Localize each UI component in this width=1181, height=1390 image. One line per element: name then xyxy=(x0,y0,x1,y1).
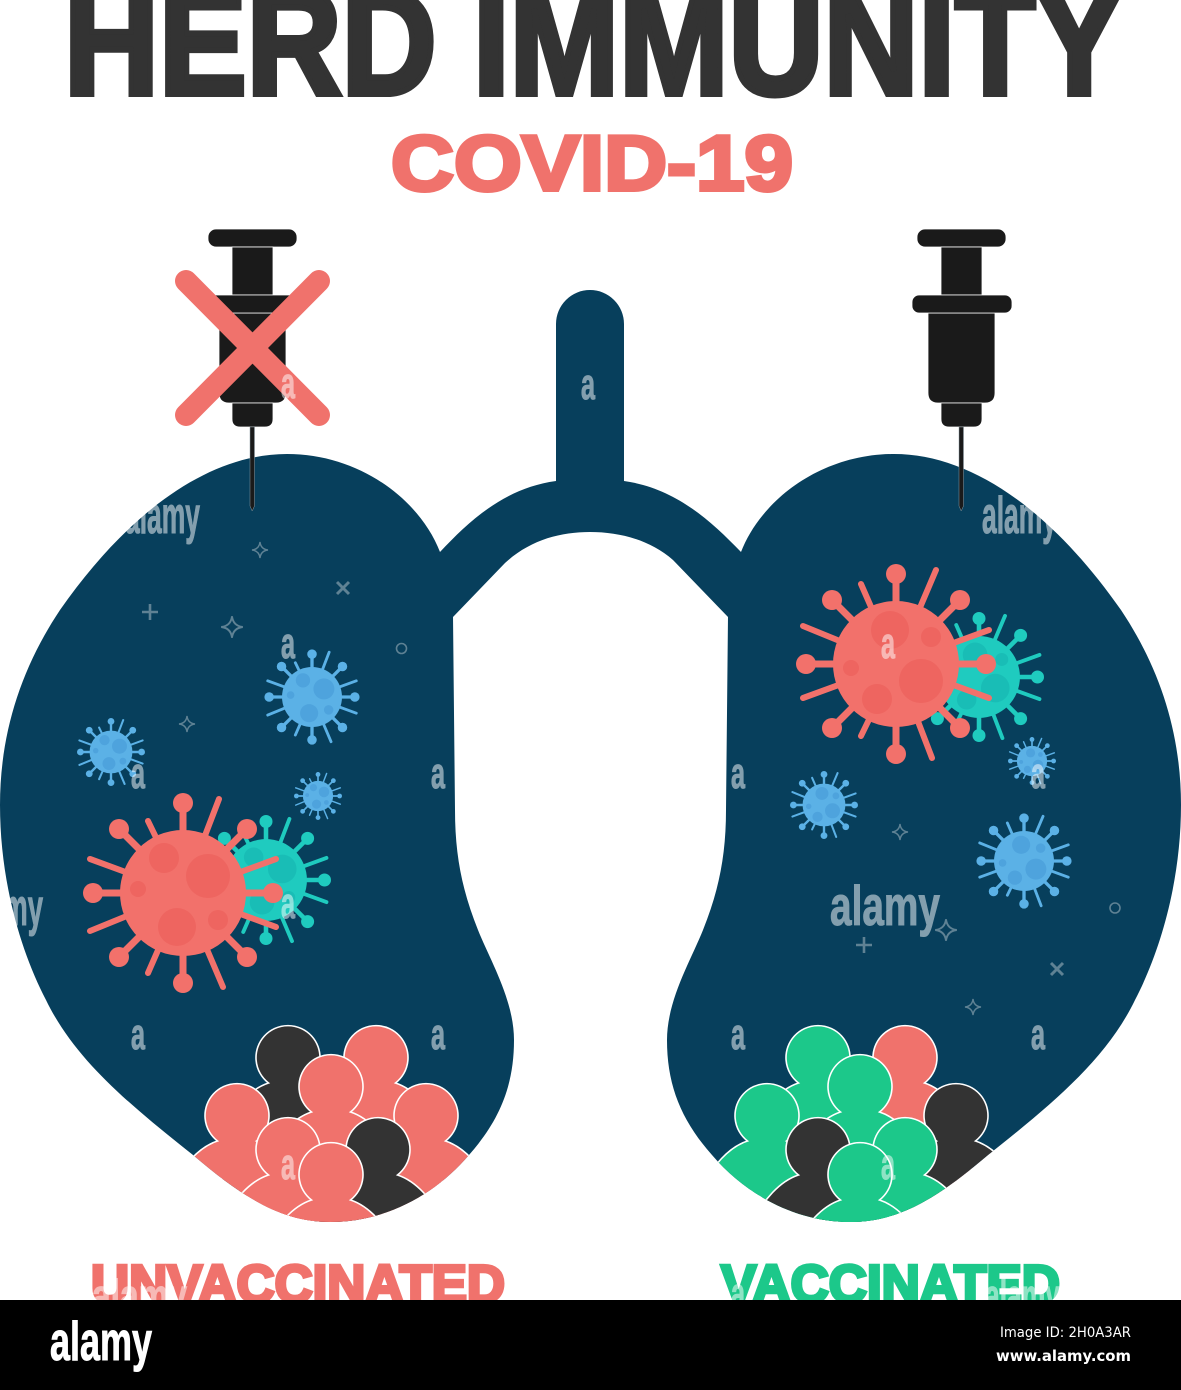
decorative sparkles right xyxy=(856,824,1120,1015)
watermarks: alamy xyxy=(830,874,940,937)
blue virus medium xyxy=(790,771,858,839)
watermarks: a xyxy=(431,749,445,798)
blue virus small xyxy=(294,772,342,820)
coral virus xyxy=(796,564,996,764)
watermarks: a xyxy=(881,1140,895,1189)
footer image id: Image ID: 2H0A3AR xyxy=(1000,1325,1131,1341)
viruses in left lung xyxy=(77,649,360,993)
watermarks: a xyxy=(581,360,595,409)
left lung xyxy=(0,454,514,1222)
viruses in right lung xyxy=(790,564,1072,909)
teal virus xyxy=(914,612,1044,742)
watermarks: a xyxy=(881,619,895,668)
footer website: www.alamy.com xyxy=(996,1347,1131,1365)
watermarks xyxy=(0,359,1060,1320)
watermarks: alamy xyxy=(985,1271,1060,1320)
watermarks: a xyxy=(131,1010,145,1059)
footer logo: alamy xyxy=(50,1310,152,1372)
watermarks: a xyxy=(431,1010,445,1059)
icon: syringe xyxy=(912,229,1012,511)
label: vaccinated: VACCINATED xyxy=(721,1255,1060,1314)
watermarks: a xyxy=(731,749,745,798)
blue virus large xyxy=(976,813,1072,909)
syringe left xyxy=(203,229,303,511)
label: unvaccinated: UNVACCINATED xyxy=(91,1255,505,1314)
blue virus small xyxy=(1008,737,1056,785)
decorative sparkles left xyxy=(142,542,406,732)
watermarks: a xyxy=(281,1140,295,1189)
watermarks: a xyxy=(1031,1010,1045,1059)
watermarks: alamy xyxy=(125,487,200,545)
right lung xyxy=(667,454,1181,1222)
trachea and bronchi xyxy=(430,290,751,617)
red cross xyxy=(186,281,319,415)
blue virus medium xyxy=(77,718,145,786)
watermarks: a xyxy=(281,879,295,928)
watermarks: a xyxy=(281,359,295,408)
coral virus xyxy=(83,793,283,993)
teal virus xyxy=(201,815,331,945)
crowd: vaccinated xyxy=(718,1024,994,1222)
watermarks: alamy xyxy=(92,1271,187,1320)
footer bar xyxy=(0,1300,1181,1390)
blue virus large xyxy=(264,649,360,745)
watermarks: a xyxy=(281,619,295,668)
watermarks: a xyxy=(731,1269,745,1318)
watermarks: a xyxy=(731,1010,745,1059)
watermarks: alamy xyxy=(982,487,1057,545)
crowd: unvaccinated xyxy=(194,1024,469,1222)
watermarks: a xyxy=(131,749,145,798)
watermarks: a xyxy=(1031,749,1045,798)
subtitle: COVID-19 xyxy=(391,119,793,207)
icon: crossed-out syringe xyxy=(186,229,319,511)
